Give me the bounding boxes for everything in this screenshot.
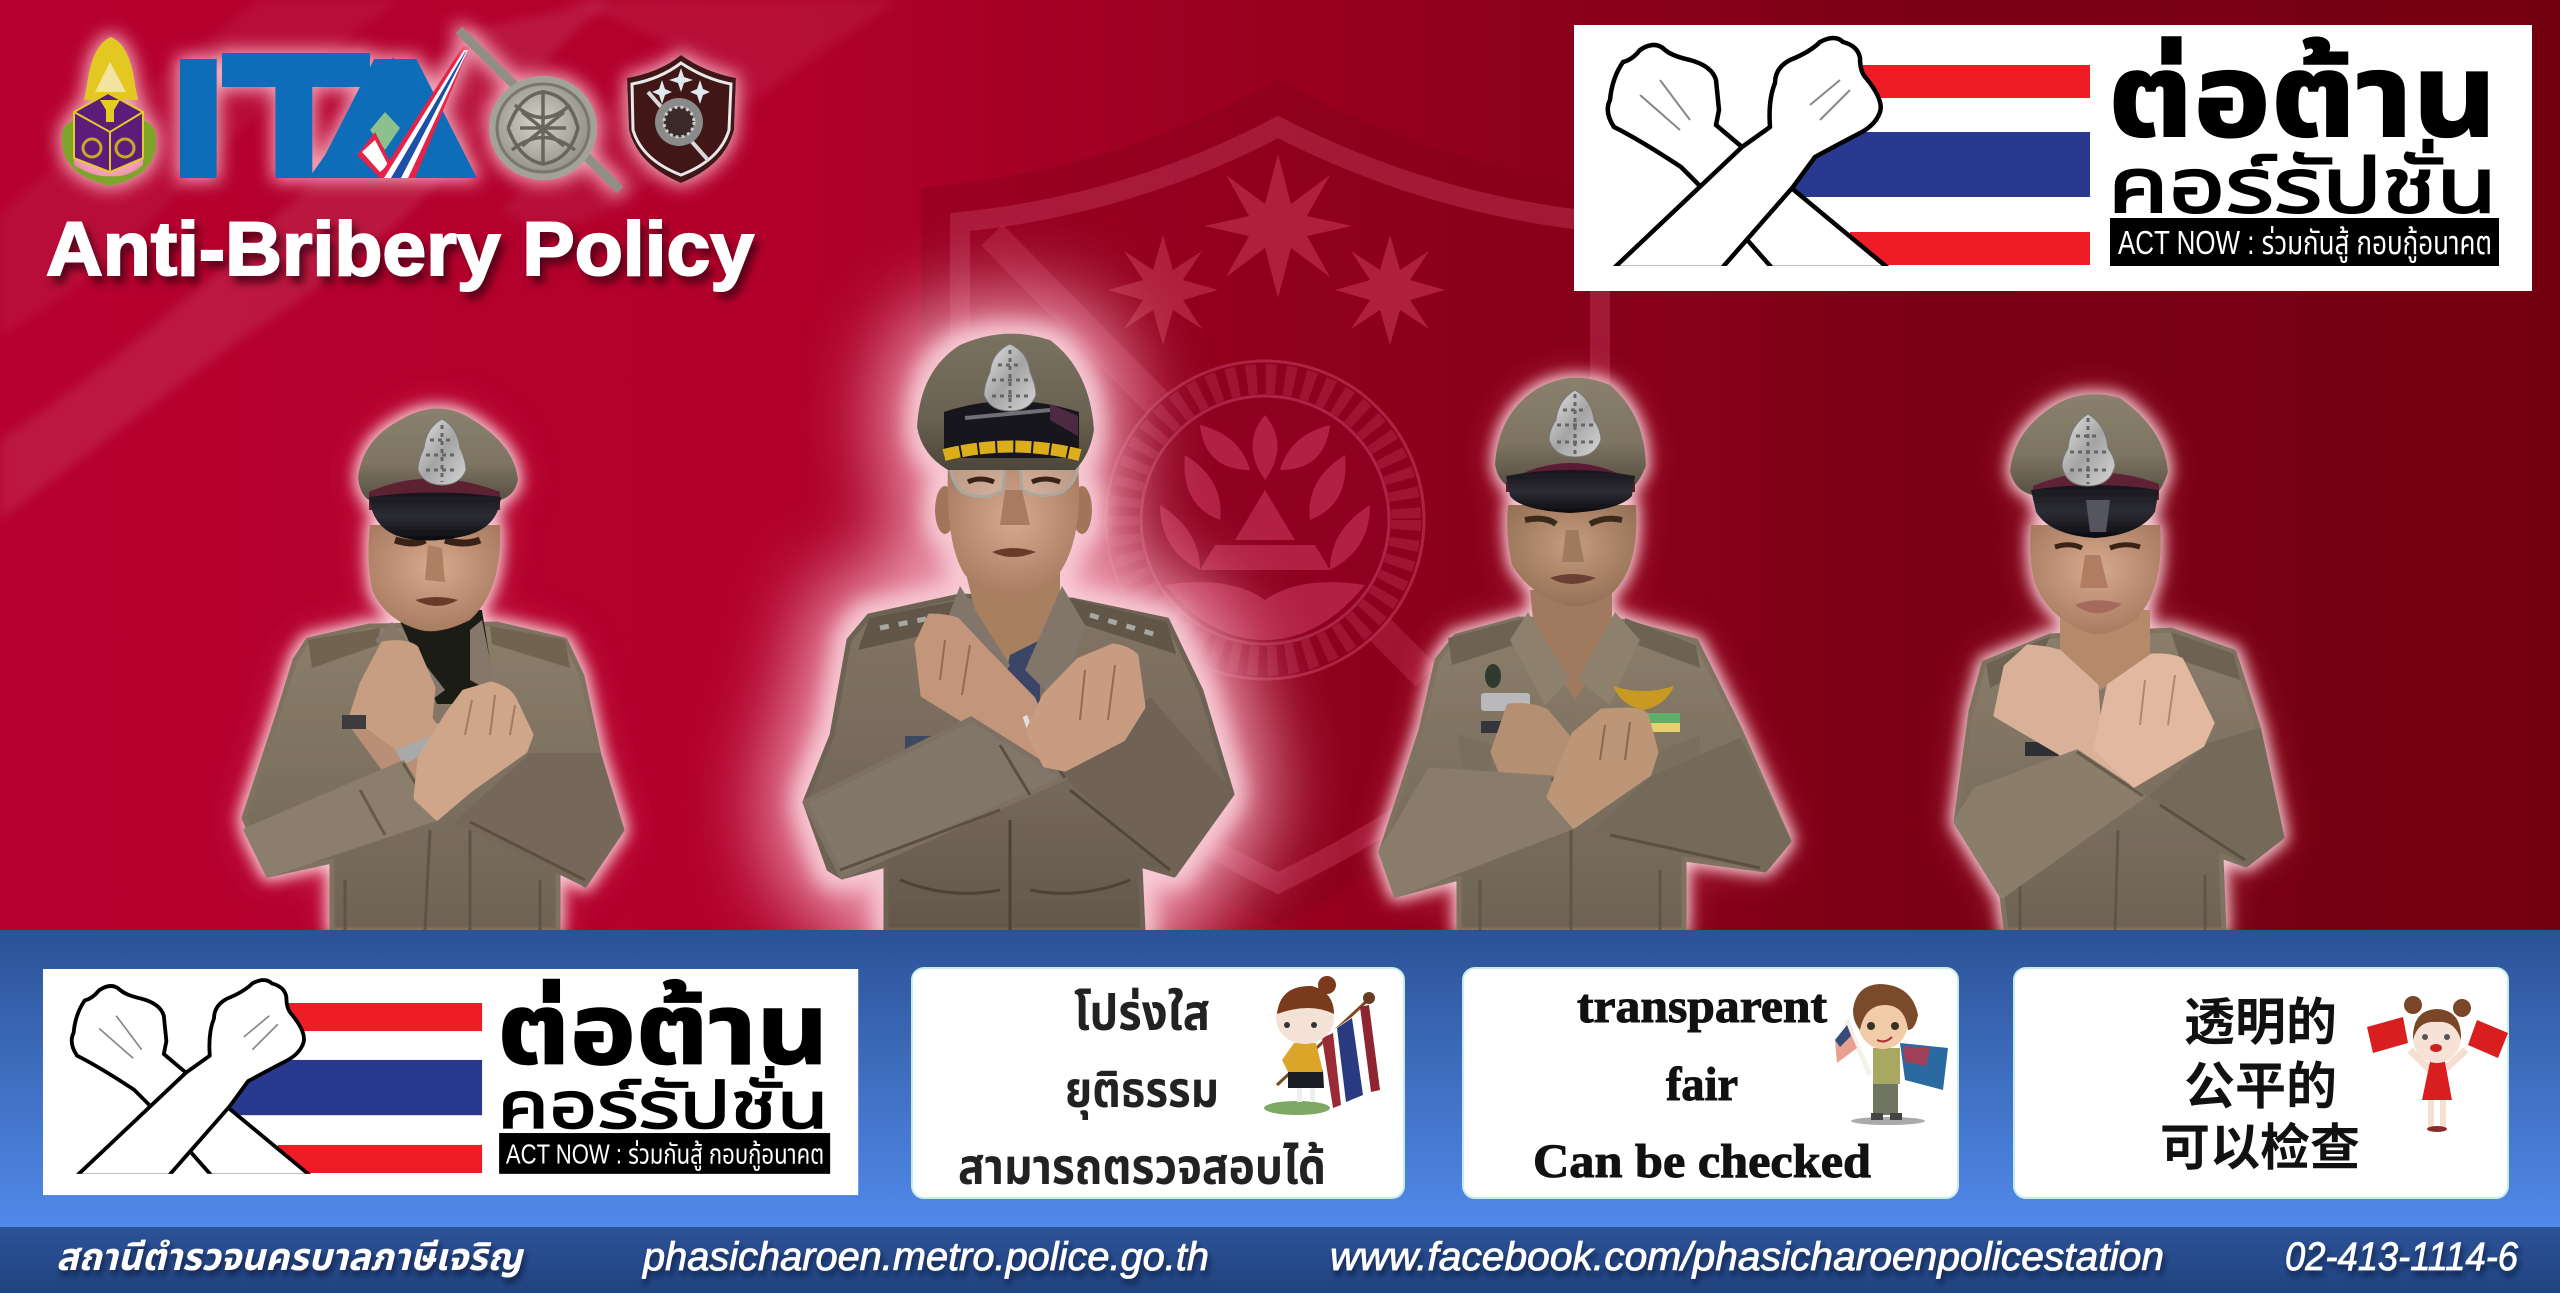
card: English [1463,968,1958,1198]
back sleeve [2152,730,2282,865]
shoulder boards [1986,636,2050,688]
cap [1495,378,1646,485]
body silhouette [805,596,1232,930]
logo: silver sword and medallion [459,30,620,190]
neck [2060,610,2150,690]
cap badge [2062,414,2115,486]
cap [2010,394,2168,495]
background swooshes [0,0,900,520]
headline: corruption: คอร์รัปชั่น [497,1066,828,1142]
footer bar [0,1227,2560,1293]
title: Anti-Bribery Policy [46,207,754,292]
front fist and forearm [1549,710,1656,826]
police officer 1 [244,408,622,930]
headline: oppose: ต่อต้าน [497,974,828,1084]
collar and neck [965,570,1060,690]
flag stripes [1770,65,2090,265]
body silhouette [1956,630,2282,930]
shoulder boards with pips [858,596,1176,654]
transparent: transparent [1577,980,1827,1033]
body silhouette [244,624,622,930]
crossed arms icon [1608,38,1888,268]
act now strip [2110,218,2499,266]
blue band [0,930,2560,1227]
front fist and forearm [1028,646,1143,769]
back forearm [375,700,430,775]
collar [375,622,445,705]
headline: oppose: ต่อต้าน [2108,31,2497,161]
head [1507,505,1636,606]
icon: girl with Thai flag [1264,976,1380,1115]
cap [917,334,1094,470]
website: phasicharoen.metro.police.go.th [642,1235,1209,1279]
neck and collar [1530,590,1612,700]
front sleeve [1381,770,1574,895]
front sleeve [246,763,437,875]
back fist and forearm [1996,647,2140,795]
can be checked: 可以检查 [2160,1108,2360,1180]
sword [992,235,1426,676]
pocket flaps [1458,735,1700,785]
flag stripes [210,1003,482,1173]
back fist [352,643,437,747]
police officer 4 [1956,394,2282,930]
back sleeve [457,755,622,885]
badges and medals [1481,664,1680,733]
seal [1106,361,1424,679]
stars [1108,154,1445,345]
logo: station shield [627,55,736,183]
lower anti-corruption banner [43,969,858,1195]
logo: Royal Thai Police emblem [62,37,156,186]
cap badge [984,344,1036,411]
cap badge [1549,390,1601,457]
watch [393,723,445,765]
card: Chinese [2014,968,2508,1198]
watermark: station shield with stars and seal [921,79,1630,925]
back sleeve [1596,740,1789,870]
top anti-corruption banner [1574,25,2532,291]
watch strap [1025,716,1035,745]
head [368,525,500,631]
fair: fair [1666,1058,1738,1111]
front sleeve [805,719,1065,877]
can be checked: สามารถตรวจสอบได้ [958,1139,1326,1195]
card: Thai [912,968,1404,1198]
logo: ITA: ITA [165,23,481,213]
shoulder boards [1448,618,1530,665]
shoulder boards [308,628,380,668]
front forearm and fist [416,684,531,818]
body silhouette [1381,619,1789,930]
name tag [905,736,967,750]
head [2030,525,2161,634]
fair: 公平的 [2184,1045,2337,1119]
name tag [342,715,366,729]
cap badge [418,419,466,485]
ribbon [357,132,392,178]
gold braid [944,446,1080,455]
phone: 02-413-1114-6 [2285,1235,2519,1279]
icon: girl with Chinese flags [2367,996,2508,1132]
police officer 2, centre commander [805,334,1232,930]
name tag [2025,742,2059,756]
head [935,486,955,534]
back fist and forearm [1493,706,1600,815]
background: red gradient [0,0,2560,932]
lower anti-corruption banner: ACT NOW : ร่วมกันสู้ กอบกู้อนาคต [506,1139,824,1172]
front sleeve [1956,752,2143,896]
facebook: www.facebook.com/phasicharoenpolicestation [1330,1235,2164,1279]
transparent: โปร่งใส [1074,985,1210,1041]
cap [358,408,518,500]
neck and dark shirt [395,610,497,704]
back fist and forearm [917,616,1060,770]
police officer 3 [1381,378,1789,930]
icon: boy with flags [1835,984,1948,1125]
act now strip [499,1133,830,1174]
transparent: 透明的 [2184,981,2337,1055]
glasses [950,462,1078,497]
station name: สถานีตำรวจนครบาลภาษีเจริญ [56,1237,524,1279]
fair: ยุติธรรม [1065,1062,1219,1120]
crossed arms icon [72,980,310,1176]
can be checked: Can be checked [1533,1135,1871,1188]
back sleeve [1060,700,1232,875]
front fist and forearm [2096,656,2212,785]
headline: corruption: คอร์รัปชั่น [2108,139,2497,229]
